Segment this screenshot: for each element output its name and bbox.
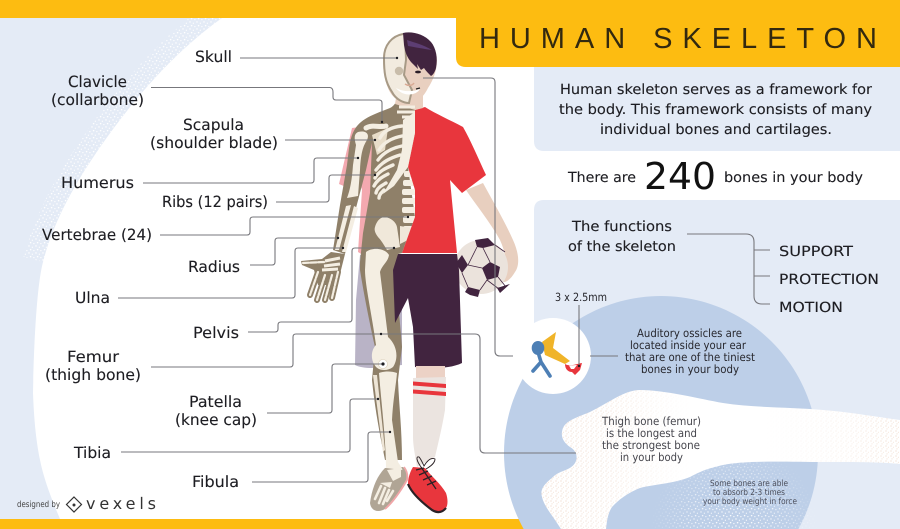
label: femur: Femur bbox=[67, 348, 120, 366]
intro text: Human skeleton serves as a framework for bbox=[560, 82, 872, 98]
ghost shirt bbox=[339, 125, 375, 255]
ossicles fact: bones in your body bbox=[641, 363, 739, 376]
bone count statement: 240 bbox=[644, 155, 716, 198]
fibula bbox=[373, 375, 385, 452]
label: scapula: (shoulder blade) bbox=[150, 134, 278, 152]
ossicles fact: that are one of the tiniest bbox=[625, 351, 756, 364]
label: clavicle bbox=[51, 73, 144, 109]
label: humerus: Humerus bbox=[61, 174, 134, 192]
background: left blue area bbox=[0, 18, 222, 519]
bone count statement: bones in your body bbox=[724, 170, 863, 186]
clavicle and shoulder bbox=[366, 126, 386, 128]
ghost shorts bbox=[355, 255, 402, 368]
panel: intro bbox=[534, 60, 900, 151]
ossicles size label: 3 x 2.5mm bbox=[555, 291, 607, 304]
shorts bbox=[393, 254, 462, 368]
skull bbox=[384, 34, 412, 103]
functions connector bbox=[687, 234, 770, 304]
label: patella: Patella bbox=[189, 393, 242, 411]
label: patella bbox=[175, 393, 257, 429]
label: clavicle: Clavicle bbox=[68, 73, 127, 91]
ossicles fact: located inside your ear bbox=[630, 339, 746, 352]
functions list: SUPPORT bbox=[779, 244, 854, 260]
force fact: Some bones are able bbox=[710, 479, 788, 489]
watermark: vexels bbox=[86, 494, 156, 513]
label: fibula: Fibula bbox=[192, 473, 239, 491]
big blue circle bbox=[504, 296, 820, 529]
functions heading: The functions bbox=[571, 219, 672, 235]
shirt bbox=[402, 107, 486, 253]
bone count statement: There are bbox=[567, 170, 636, 186]
figure bbox=[301, 32, 518, 512]
title banner bbox=[440, 0, 900, 67]
hand bbox=[301, 252, 345, 300]
upper spine and sternum bbox=[383, 112, 415, 194]
spine bbox=[402, 171, 416, 233]
humerus bbox=[347, 131, 368, 198]
intro text bbox=[559, 82, 872, 138]
label: scapula: Scapula bbox=[183, 116, 244, 134]
head bbox=[383, 32, 437, 110]
force fact: your body weight in force bbox=[703, 497, 797, 507]
femur bbox=[365, 249, 396, 370]
leader lines bbox=[118, 57, 580, 482]
label: ulna: Ulna bbox=[75, 289, 110, 307]
femur fact: in your body bbox=[620, 451, 683, 464]
bone count statement bbox=[567, 155, 863, 198]
label: clavicle: (collarbone) bbox=[51, 91, 144, 109]
yellow top bar bbox=[0, 0, 900, 18]
intro text: individual bones and cartilages. bbox=[600, 122, 832, 138]
functions list bbox=[779, 244, 879, 316]
ossicles connector lines bbox=[579, 305, 618, 366]
force fact: to absorb 2-3 times bbox=[713, 488, 785, 498]
title: HUMAN SKELETON bbox=[479, 23, 877, 55]
label: tibia: Tibia bbox=[73, 444, 111, 462]
icon: ossicles bbox=[515, 318, 591, 394]
panel: functions bbox=[534, 200, 900, 529]
patella bbox=[378, 360, 388, 368]
neck vertebrae bbox=[397, 107, 415, 117]
functions heading: of the skeleton bbox=[568, 239, 676, 255]
femur fact: Thigh bone (femur) bbox=[601, 415, 701, 428]
label: patella: (knee cap) bbox=[175, 411, 257, 429]
femur shape bbox=[541, 390, 900, 529]
yellow bottom bar bbox=[0, 519, 527, 529]
label: scapula bbox=[150, 116, 278, 152]
ossicles fact: Auditory ossicles are bbox=[637, 327, 742, 340]
femur fact bbox=[601, 415, 701, 464]
scapula bbox=[372, 128, 388, 155]
sock bbox=[413, 377, 446, 467]
femur fact: is the longest and bbox=[606, 427, 697, 440]
watermark: designed by bbox=[17, 500, 60, 510]
ribs bbox=[374, 126, 402, 198]
functions heading bbox=[568, 219, 676, 255]
label: femur bbox=[45, 348, 141, 384]
right lower leg bbox=[416, 366, 445, 380]
watermark bbox=[17, 494, 156, 513]
pelvis bbox=[375, 217, 412, 250]
femur fact: the strongest bone bbox=[602, 439, 700, 452]
right arm bbox=[466, 183, 518, 282]
taupe arm, torso and leg bbox=[333, 98, 415, 460]
foot bbox=[370, 467, 407, 511]
label: pelvis: Pelvis bbox=[193, 324, 239, 342]
label: vertebrae: Vertebrae (24) bbox=[42, 226, 152, 244]
functions list: PROTECTION bbox=[779, 272, 879, 288]
force fact bbox=[703, 479, 797, 507]
radius and ulna bbox=[335, 205, 358, 252]
shoe bbox=[408, 457, 448, 512]
label: skull: Skull bbox=[195, 48, 232, 66]
functions list: MOTION bbox=[779, 300, 843, 316]
label: ribs: Ribs (12 pairs) bbox=[162, 193, 268, 211]
ossicles fact bbox=[625, 327, 756, 376]
intro text: the body. This framework consists of many bbox=[559, 102, 872, 118]
football bbox=[454, 238, 510, 297]
label: radius: Radius bbox=[188, 258, 240, 276]
label: femur: (thigh bone) bbox=[45, 366, 141, 384]
tibia bbox=[379, 372, 402, 470]
hair bbox=[403, 32, 437, 76]
